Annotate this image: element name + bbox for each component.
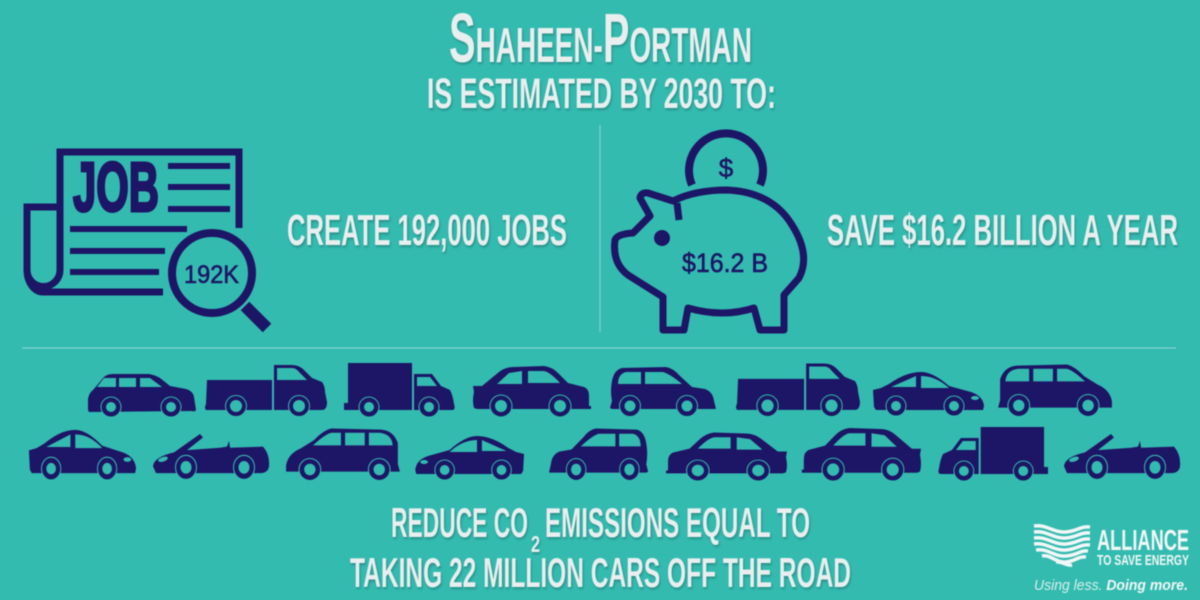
horizontal divider [22,347,1176,349]
vertical divider [599,125,601,332]
row of vehicles: top [88,363,1112,417]
icon: piggy bank with coin: $16.2 B [682,248,768,278]
logo: Alliance to Save Energy [1034,525,1189,594]
emissions statement: TAKING 22 MILLION CARS OFF THE ROAD [350,549,851,596]
row of vehicles: bottom [29,427,1180,481]
icon: piggy bank with coin [615,133,804,330]
emissions statement [350,499,851,596]
logo: Alliance to Save Energy: Using less. Doing more. [1034,577,1188,594]
icon: piggy bank with coin: $ [719,153,734,183]
title: SHAHEEN-PORTMAN [449,0,752,77]
emissions statement: EMISSIONS EQUAL TO [545,499,810,546]
icon: job newspaper with magnifier: 192K [184,261,239,289]
jobs label: CREATE 192,000 JOBS [287,206,567,255]
icon: job newspaper with magnifier [27,148,267,328]
subtitle: IS ESTIMATED BY 2030 TO: [427,70,776,118]
emissions statement: REDUCE CO [391,499,528,546]
icon: job newspaper with magnifier: JOB [73,148,159,226]
emissions statement: 2 [531,531,540,557]
